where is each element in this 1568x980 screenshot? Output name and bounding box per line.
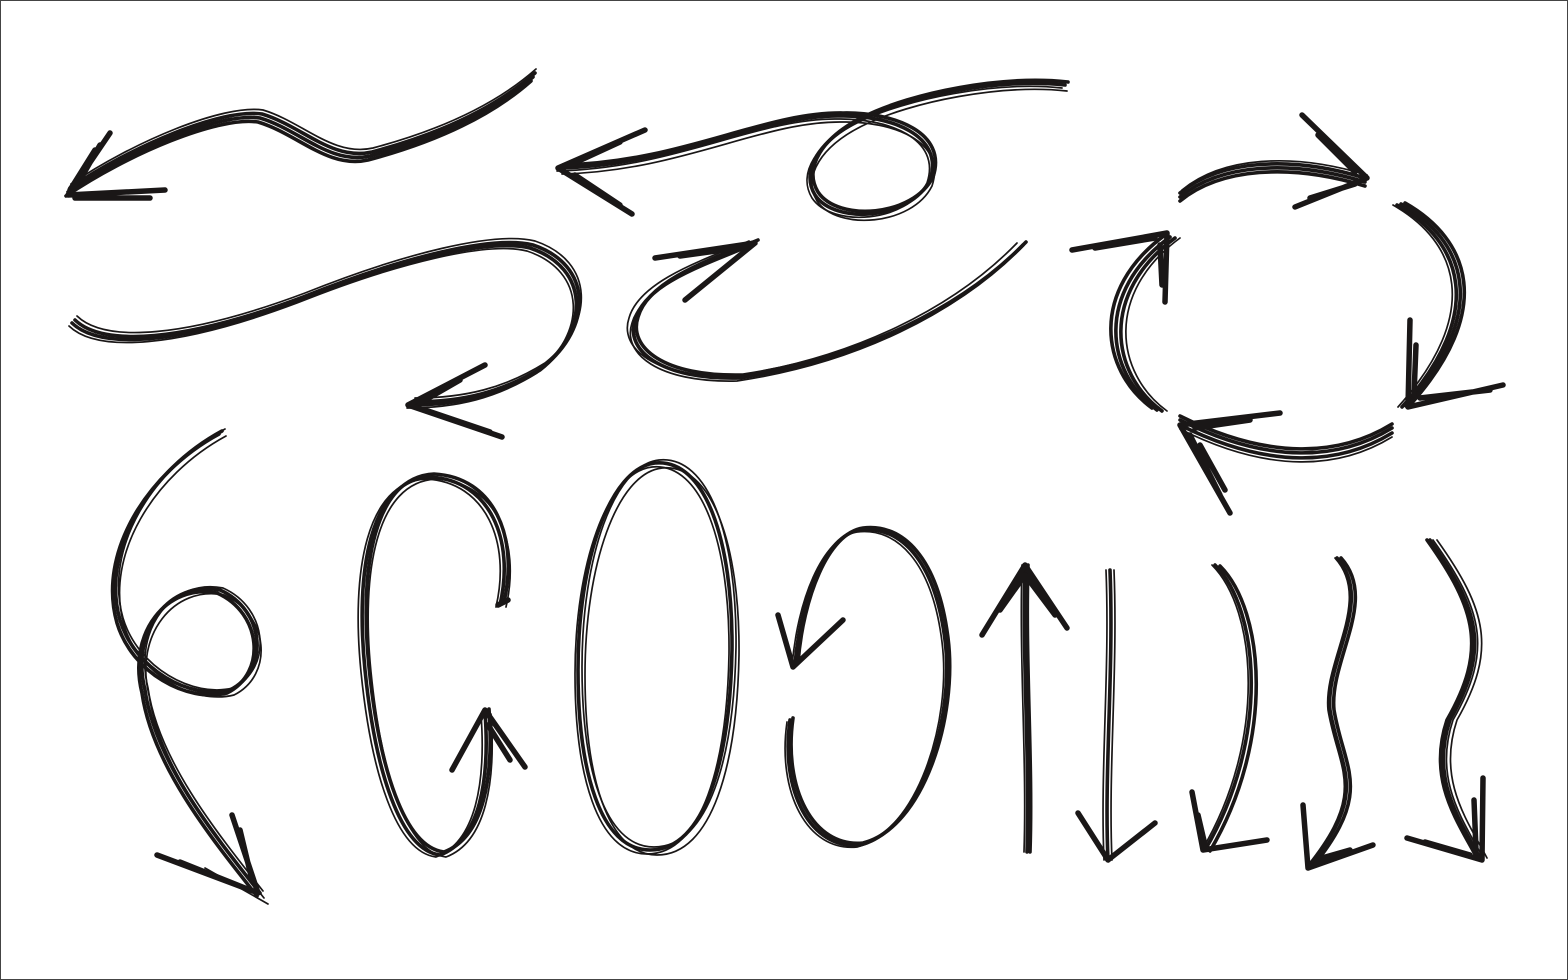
arrow: wavy down (1303, 558, 1373, 868)
cycle of four arrows (1072, 115, 1503, 513)
arrow: wavy down far right (1407, 540, 1487, 860)
arrow: U-turn pointing up-right (627, 240, 1026, 381)
arrow: curved down (1192, 565, 1267, 851)
oval scribble (575, 460, 739, 855)
arrow: tall C-loop pointing up (358, 474, 525, 857)
arrow: S-curve pointing left (69, 239, 581, 437)
cycle arrow: bottom (1180, 413, 1392, 513)
arrow: looped pointing left (557, 80, 1068, 220)
arrow: looped pointing down-right (113, 429, 268, 904)
arrow: straight down (1078, 570, 1155, 860)
cycle arrow: left (1072, 233, 1180, 411)
arrow: oval loop pointing down-left (778, 528, 950, 847)
cycle arrow: top (1180, 115, 1367, 207)
arrow: wavy pointing left (66, 69, 536, 198)
cycle arrow: right (1393, 203, 1503, 407)
arrow: straight up (982, 565, 1067, 852)
